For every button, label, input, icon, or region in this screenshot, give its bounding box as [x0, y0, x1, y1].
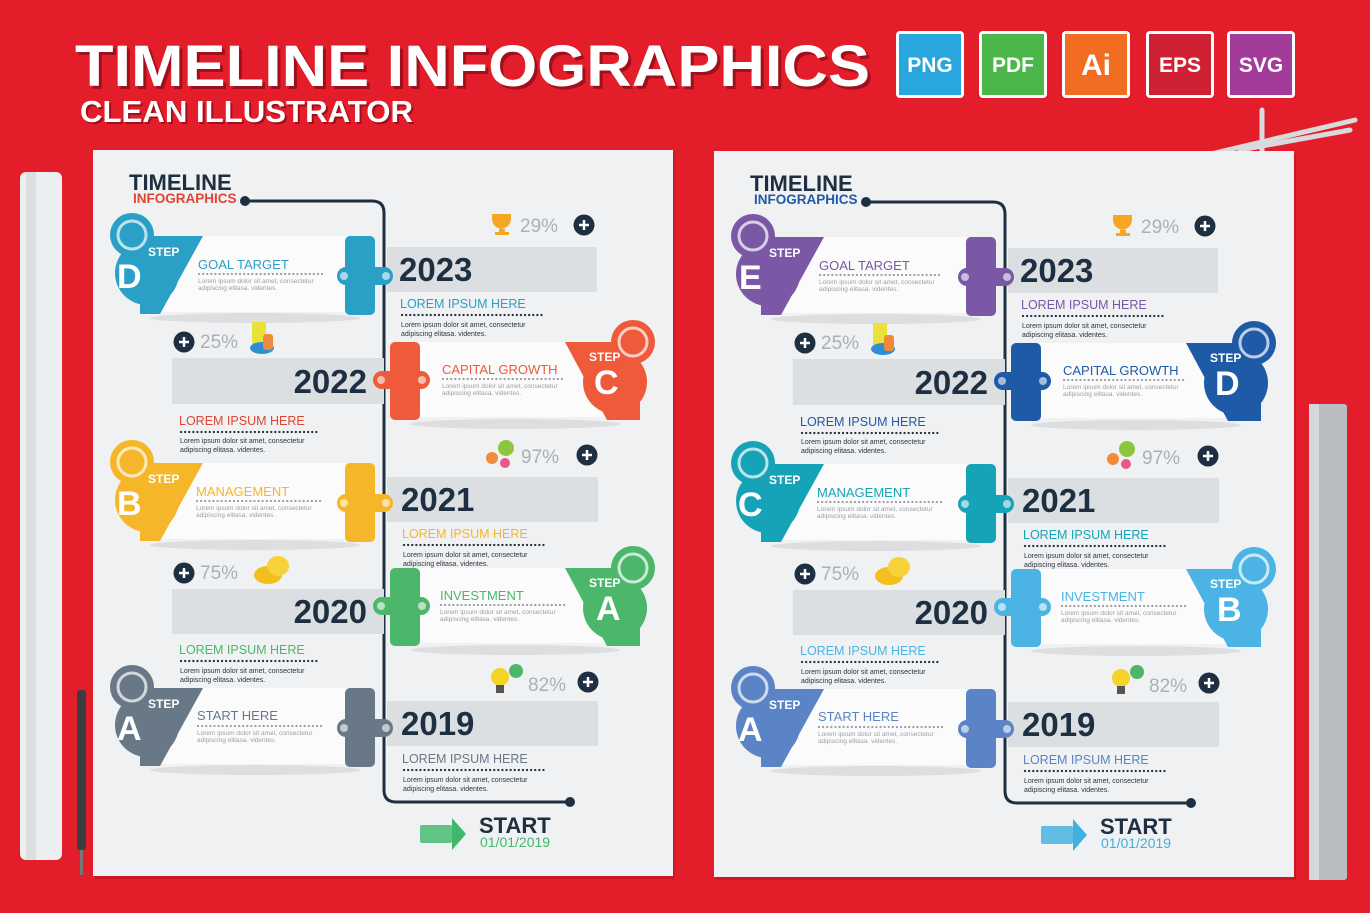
percentages with icons	[794, 215, 1220, 697]
card: step B management: adipiscing elitasa. videntes.	[196, 512, 275, 519]
card: step C capital growth: CAPITAL GROWTH	[442, 362, 558, 377]
card: step B management: Lorem ipsum dolor sit amet, consectetur	[196, 505, 312, 512]
card: step A start here	[731, 666, 1014, 776]
card: step C management: MANAGEMENT	[817, 485, 910, 500]
text blocks: lorem ipsum: Lorem ipsum dolor sit amet, consectetur	[1024, 778, 1149, 785]
card: step D capital growth: CAPITAL GROWTH	[1063, 363, 1179, 378]
card: step C capital growth: Lorem ipsum dolor sit amet, consectetur	[442, 383, 558, 390]
card: step C management	[731, 441, 1014, 551]
text blocks: lorem ipsum: LOREM IPSUM HERE	[800, 644, 926, 658]
page heading	[750, 171, 858, 207]
card: step E goal target: STEP	[769, 246, 800, 260]
card: step A investment: INVESTMENT	[440, 588, 524, 603]
card: step D capital growth: Lorem ipsum dolor sit amet, consectetur	[1063, 384, 1179, 391]
main title: TIMELINE INFOGRAPHICS	[78, 37, 873, 102]
text blocks: lorem ipsum: adipiscing elitasa. videntes.	[401, 331, 486, 338]
subtitle: CLEAN ILLUSTRATOR	[82, 96, 415, 131]
card: step D goal target: D	[117, 258, 142, 296]
card: step E goal target: Lorem ipsum dolor sit amet, consectetur	[819, 279, 935, 286]
percentages with icons: 97%	[521, 447, 559, 468]
start label	[1041, 814, 1172, 851]
badge: SVG	[1227, 31, 1295, 98]
percentages with icons: 82%	[1149, 676, 1187, 697]
card: step D capital growth: STEP	[1210, 351, 1241, 365]
card: step A investment: adipiscing elitasa. videntes.	[440, 616, 519, 623]
percentages with icons: 97%	[1142, 448, 1180, 469]
text blocks: lorem ipsum: LOREM IPSUM HERE	[402, 752, 528, 766]
start label: START	[479, 813, 551, 838]
decoration: pen	[77, 690, 86, 875]
main title: TIMELINE INFOGRAPHICS	[75, 34, 870, 99]
card: step B investment: INVESTMENT	[1061, 589, 1145, 604]
badge: Ai	[1062, 31, 1130, 98]
card: step B investment: STEP	[1210, 577, 1241, 591]
card: step C capital growth	[373, 320, 655, 429]
text blocks: lorem ipsum: Lorem ipsum dolor sit amet, consectetur	[801, 439, 926, 446]
card: step B investment: B	[1217, 591, 1242, 629]
decoration: paper roll	[20, 172, 62, 860]
card: step D goal target: GOAL TARGET	[198, 257, 289, 272]
text blocks: lorem ipsum: adipiscing elitasa. videntes.	[801, 678, 886, 685]
year bands	[793, 248, 1219, 747]
card: step E goal target: adipiscing elitasa. videntes.	[819, 286, 898, 293]
card: step A start here: START HERE	[818, 709, 899, 724]
card: step E goal target	[731, 214, 1014, 324]
card: step B management: B	[117, 485, 142, 523]
card: step C management: C	[738, 486, 763, 524]
panel: right page	[714, 151, 1296, 880]
start label: 01/01/2019	[480, 834, 550, 850]
card: step C management: Lorem ipsum dolor sit amet, consectetur	[817, 506, 933, 513]
card: step A investment	[373, 546, 655, 655]
text blocks: lorem ipsum: adipiscing elitasa. videntes.	[180, 447, 265, 454]
card: step A start here: A	[117, 710, 142, 748]
card: step B management: STEP	[148, 472, 179, 486]
card: step A investment: Lorem ipsum dolor sit amet, consectetur	[440, 609, 556, 616]
card: step E goal target: E	[739, 259, 762, 297]
timeline line	[861, 197, 1196, 808]
card: step E goal target: GOAL TARGET	[819, 258, 910, 273]
card: step C capital growth: C	[594, 364, 619, 402]
card: step C management: STEP	[769, 473, 800, 487]
text blocks: lorem ipsum: Lorem ipsum dolor sit amet, consectetur	[401, 322, 526, 329]
card: step A investment: STEP	[589, 576, 620, 590]
subtitle: CLEAN ILLUSTRATOR	[80, 94, 413, 129]
text blocks: lorem ipsum: adipiscing elitasa. videntes.	[1022, 332, 1107, 339]
card: step A start here: STEP	[148, 697, 179, 711]
percentages with icons: 25%	[200, 332, 238, 353]
card: step B investment	[994, 547, 1276, 656]
card: step D capital growth: adipiscing elitasa. videntes.	[1063, 391, 1142, 398]
text blocks: lorem ipsum: LOREM IPSUM HERE	[1023, 753, 1149, 767]
badge: EPS: EPS	[1159, 54, 1201, 77]
card: step B management: MANAGEMENT	[196, 484, 289, 499]
percentages with icons: 29%	[520, 216, 558, 237]
badge: PDF	[979, 31, 1047, 98]
card: step C management: adipiscing elitasa. videntes.	[817, 513, 896, 520]
text blocks: lorem ipsum: adipiscing elitasa. videntes.	[1024, 562, 1109, 569]
badge: SVG: SVG	[1239, 54, 1283, 77]
text blocks: lorem ipsum: LOREM IPSUM HERE	[400, 297, 526, 311]
percentages with icons: 75%	[821, 564, 859, 585]
card: step A start here: STEP	[769, 698, 800, 712]
percentages with icons: 82%	[528, 675, 566, 696]
text blocks: lorem ipsum: adipiscing elitasa. videntes.	[180, 677, 265, 684]
years: 2021	[1022, 482, 1095, 519]
percentages with icons: 75%	[200, 563, 238, 584]
badge: EPS	[1146, 31, 1214, 98]
start label: START	[1100, 814, 1172, 839]
text blocks: lorem ipsum: Lorem ipsum dolor sit amet, consectetur	[801, 669, 926, 676]
start label	[420, 813, 551, 850]
page heading: INFOGRAPHICS	[133, 191, 237, 206]
text blocks: lorem ipsum: adipiscing elitasa. videntes.	[801, 448, 886, 455]
card: step B management	[110, 440, 393, 550]
text blocks: lorem ipsum: Lorem ipsum dolor sit amet, consectetur	[403, 552, 528, 559]
years: 2019	[1022, 706, 1095, 743]
years: 2023	[399, 251, 472, 288]
card: step C capital growth: adipiscing elitasa. videntes.	[442, 390, 521, 397]
card: step A start here: START HERE	[197, 708, 278, 723]
text blocks: lorem ipsum: LOREM IPSUM HERE	[800, 415, 926, 429]
card: step D goal target: adipiscing elitasa. videntes.	[198, 285, 277, 292]
years	[915, 252, 1095, 743]
timeline line	[240, 196, 575, 807]
text blocks: lorem ipsum	[800, 298, 1165, 794]
card: step A start here: adipiscing elitasa. videntes.	[197, 737, 276, 744]
card: step A start here: Lorem ipsum dolor sit amet, consectetur	[197, 730, 313, 737]
percentages with icons	[174, 214, 598, 696]
years: 2020	[915, 594, 988, 631]
badge: PDF: PDF	[992, 54, 1034, 77]
page heading	[129, 170, 237, 206]
years: 2021	[401, 481, 474, 518]
text blocks: lorem ipsum: Lorem ipsum dolor sit amet, consectetur	[1022, 323, 1147, 330]
card: step D goal target: Lorem ipsum dolor sit amet, consectetur	[198, 278, 314, 285]
card: step D capital growth	[994, 321, 1276, 430]
decoration: ruler	[1309, 404, 1347, 880]
years: 2020	[294, 593, 367, 630]
card: step D capital growth: D	[1215, 365, 1240, 403]
text blocks: lorem ipsum: adipiscing elitasa. videntes.	[1024, 787, 1109, 794]
card: step D goal target: STEP	[148, 245, 179, 259]
years: 2019	[401, 705, 474, 742]
card: step A start here: adipiscing elitasa. videntes.	[818, 738, 897, 745]
text blocks: lorem ipsum: LOREM IPSUM HERE	[179, 643, 305, 657]
text blocks: lorem ipsum: LOREM IPSUM HERE	[1023, 528, 1149, 542]
text blocks: lorem ipsum: LOREM IPSUM HERE	[179, 414, 305, 428]
panel: left page	[93, 150, 675, 879]
years: 2023	[1020, 252, 1093, 289]
text blocks: lorem ipsum: Lorem ipsum dolor sit amet, consectetur	[180, 438, 305, 445]
card: step B investment: adipiscing elitasa. videntes.	[1061, 617, 1140, 624]
page heading: TIMELINE	[750, 171, 853, 196]
percentages with icons: 29%	[1141, 217, 1179, 238]
text blocks: lorem ipsum: adipiscing elitasa. videntes.	[403, 561, 488, 568]
card: step A start here: Lorem ipsum dolor sit amet, consectetur	[818, 731, 934, 738]
years	[294, 251, 474, 742]
card: step A start here: A	[738, 711, 763, 749]
text blocks: lorem ipsum	[179, 297, 544, 793]
card: step A start here	[110, 665, 393, 775]
card: step B investment: Lorem ipsum dolor sit amet, consectetur	[1061, 610, 1177, 617]
card: step D goal target	[110, 213, 393, 323]
page heading: INFOGRAPHICS	[754, 192, 858, 207]
card: step A investment: A	[596, 590, 621, 628]
decoration: compass	[1185, 110, 1355, 160]
years: 2022	[915, 364, 988, 401]
text blocks: lorem ipsum: LOREM IPSUM HERE	[402, 527, 528, 541]
years: 2022	[294, 363, 367, 400]
start label: 01/01/2019	[1101, 835, 1171, 851]
year bands	[172, 247, 598, 746]
badge: Ai: Ai	[1081, 49, 1111, 82]
text blocks: lorem ipsum: adipiscing elitasa. videntes.	[403, 786, 488, 793]
file format badges	[896, 31, 1295, 98]
card: step C capital growth: STEP	[589, 350, 620, 364]
text blocks: lorem ipsum: Lorem ipsum dolor sit amet, consectetur	[1024, 553, 1149, 560]
badge: PNG: PNG	[907, 54, 953, 77]
page heading: TIMELINE	[129, 170, 232, 195]
text blocks: lorem ipsum: Lorem ipsum dolor sit amet, consectetur	[180, 668, 305, 675]
badge: PNG	[896, 31, 964, 98]
text blocks: lorem ipsum: LOREM IPSUM HERE	[1021, 298, 1147, 312]
text blocks: lorem ipsum: Lorem ipsum dolor sit amet, consectetur	[403, 777, 528, 784]
percentages with icons: 25%	[821, 333, 859, 354]
